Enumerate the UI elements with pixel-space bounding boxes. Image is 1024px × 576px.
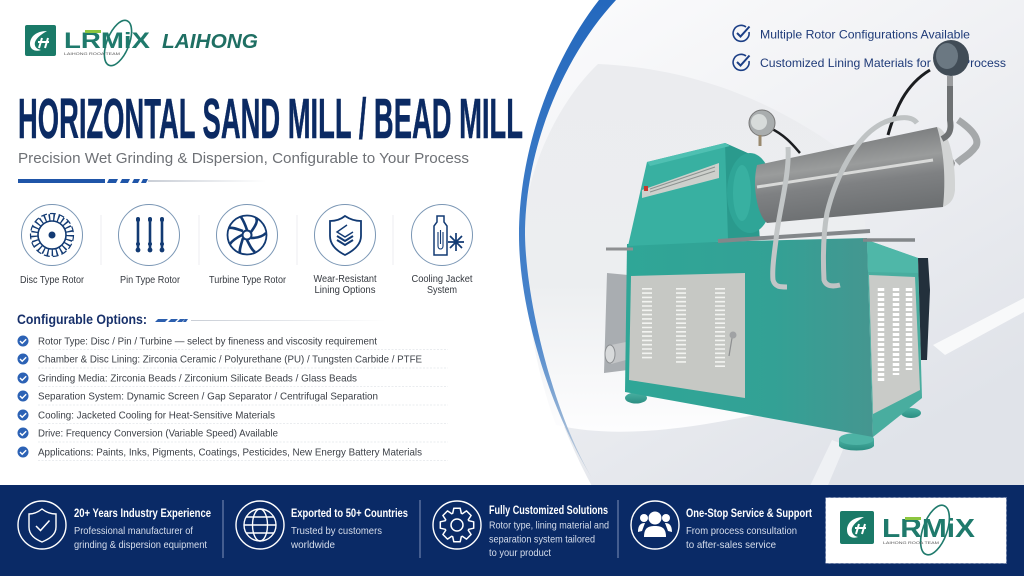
feature: export [236,501,408,551]
footer logo box: LAIHONG ROOA TEAM [883,540,939,545]
icon: wear-resistant shield [314,204,376,266]
label: turbine type rotor: Turbine Type Rotor [209,275,287,286]
icon: cooling jacket [412,204,472,266]
icon: pin type rotor [118,204,180,266]
label: wear-resistant lining options: Wear-Resistant [314,274,377,285]
feet [625,392,921,450]
machine cabinet [625,238,922,437]
option list: Separation System: Dynamic Screen / Gap Separator / Centrifugal Separation [38,392,378,402]
feature: experience [18,501,211,551]
top logo [25,17,258,69]
left grey housing [604,273,628,373]
bead mill machine [604,40,977,450]
icon: people [631,501,679,549]
check: rotor configurations: Multiple Rotor Configurations Available [760,28,970,42]
feature: experience: grinding & dispersion equipment [74,539,207,551]
feature: service: From process consultation [686,525,797,537]
feature: customized: Rotor type, lining material and [489,520,609,532]
side vent panel [869,275,920,414]
feature: customized: Fully Customized Solutions [489,503,608,517]
access door with vents [629,273,745,398]
bottom banner [0,485,1024,576]
feature: customized: separation system tailored [489,534,595,546]
feature: customized [433,501,609,559]
logo wordmark: LRMiX [64,28,150,53]
option list: Cooling: Jacketed Cooling for Heat-Sensitive Materials [38,410,275,422]
heading accent [155,319,386,322]
logo wordmark: LAIHONG ROOA TEAM [64,51,120,56]
feature: service: to after-sales service [686,539,776,551]
check: lining materials: Customized Lining Materials for Your Process [760,56,1006,70]
icon: shield check [18,501,66,549]
option list [18,336,448,460]
feature: export: worldwide [290,539,335,551]
option list: Applications: Paints, Inks, Pigments, Coatings, Pesticides, New Energy Battery Materials [38,448,422,458]
rear control box [918,258,930,360]
feature: customized: to your product [489,547,551,559]
icon: turbine type rotor [216,204,278,266]
footer logo box: LRMiX [882,513,976,543]
feature: service [631,501,812,551]
label: lining options: Lining Options [314,285,376,296]
feature: export: Exported to 50+ Countries [291,506,408,520]
label: cooling jacket: Cooling Jacket [412,274,473,285]
upper teal housing [628,143,760,246]
configurable options panel [17,311,448,460]
subtitle: Precision Wet Grinding & Dispersion, Configurable to Your Process [18,150,469,167]
icon: disc type rotor [22,204,82,266]
option list: Grinding Media: Zirconia Beads / Zirconium Silicate Beads / Glass Beads [38,374,357,384]
logo mark [25,25,56,56]
top-right feature checks [733,25,1006,70]
option list: Drive: Frequency Conversion (Variable Speed) Available [38,428,278,440]
heading: configurable options: Configurable Options: [17,311,147,327]
feature: service: One-Stop Service & Support [686,506,812,520]
feature: experience: Professional manufacturer of [74,525,193,537]
feature: export: Trusted by customers [291,525,382,537]
heading accent bar [18,179,266,183]
icon: gear [433,501,481,549]
feature: experience: 20+ Years Industry Experience [74,506,211,520]
option list: Chamber & Disc Lining: Zirconia Ceramic / Polyurethane (PU) / Tungsten Carbide / PTFE [38,354,422,366]
rotor feature icons [20,204,473,296]
icon: globe [236,501,284,549]
footer logo box [826,498,1006,564]
grinding cylinder [727,127,955,233]
rails and pipes [606,70,977,287]
label: pin type rotor: Pin Type Rotor [120,275,181,286]
label: disc type rotor: Disc Type Rotor [20,275,85,286]
logo wordmark [64,17,150,69]
label: system: System [427,285,457,296]
option list: Rotor Type: Disc / Pin / Turbine — select by fineness and viscosity requirement [38,336,377,348]
pressure gauges [749,40,969,146]
LAIHONG text: LAIHONG [162,31,258,53]
background: right panel with curved arc [519,0,1024,490]
